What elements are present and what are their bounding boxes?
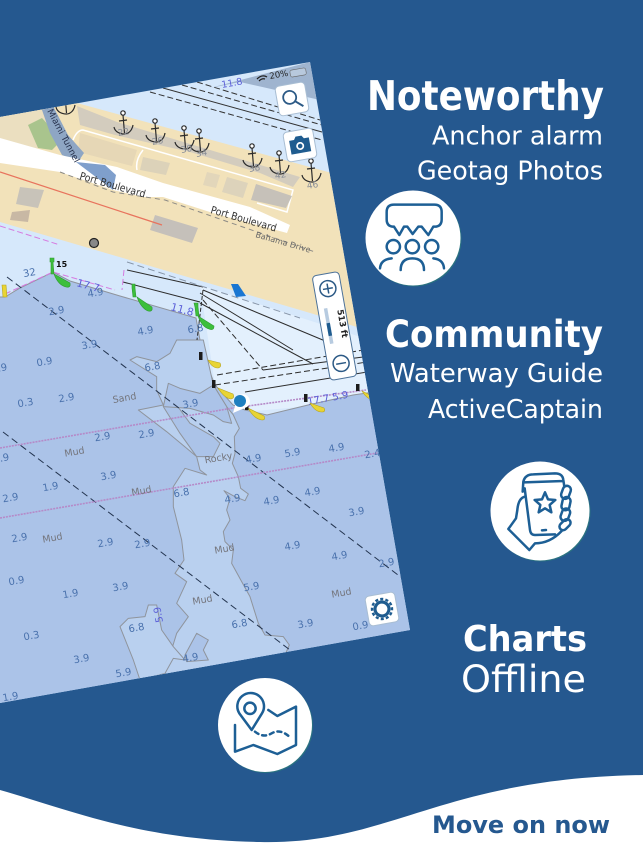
chart: dashed depth lines [3,277,402,650]
chart: depth numbers: 4.9 [304,486,321,499]
chart: depth numbers: 2.9 [11,532,28,545]
chart: depth numbers: 1.9 [2,691,19,704]
chart: purple soundings [75,76,349,623]
chart: purple soundings: 17.7 [75,277,101,295]
chart: seabed labels: Mud [192,593,213,608]
chart: anchor numbers: 46 [306,180,319,192]
chart: depth numbers: 6.8 [128,622,145,635]
chart: depth numbers: 2.4 [364,448,381,461]
chart: seabed labels: Rocky [204,451,234,466]
chart: purple soundings: 5.9 [152,606,166,623]
chart: depth numbers: 5.9 [284,447,301,460]
chart: depth numbers: 3.9 [81,339,98,352]
chart: seabed labels: Mud [42,531,63,546]
heading: Community: Community [385,313,603,356]
chart: anchor numbers: 34 [195,148,208,160]
chart: anchor numbers: 22 [117,127,130,139]
text: ActiveCaptain: ActiveCaptain [428,395,603,425]
chart: black beacons [199,352,360,410]
icon: blue boat marker [231,284,246,297]
chart: buoy number: 15 [56,260,68,269]
chart: seabed labels: Mud [331,586,352,601]
chart: road labels: Port Boulevard [78,170,147,201]
chart: purple wavy cable lines [0,390,377,518]
chart: depth numbers: 6.8 [144,361,161,374]
chart: depth numbers: 3.9 [100,470,117,483]
chart: depth numbers: 2.9 [58,392,75,405]
chart: shallow water base [0,50,420,710]
chart: anchor numbers: 38 [248,163,261,175]
button: zoom control: 513 ft [334,309,349,339]
chart: green buoys [50,258,214,330]
chart: depth numbers: 6.8 [173,487,190,500]
chart: depth numbers [0,267,395,704]
chart: seabed labels: Mud [131,484,152,499]
chart: depth numbers: 0.9 [8,575,25,588]
chart: seabed labels: Sand [112,391,137,406]
chart: depth numbers: 2.9 [97,537,114,550]
chart: anchor numbers: 30 [180,144,193,156]
chart: depth numbers: 4.9 [87,287,104,300]
chart: road labels [44,108,312,255]
chart: depth numbers: 3.9 [297,618,314,631]
button: camera [283,128,317,162]
chart: depth numbers: 4.9 [263,495,280,508]
chart: depth numbers: 2.9 [378,557,395,570]
text: Geotag Photos: Geotag Photos [417,156,603,186]
text: Move on now: Move on now [432,811,610,839]
chart: seabed labels [42,391,352,608]
chart: depth numbers: 5.9 [115,667,132,680]
heading: Noteworthy: Noteworthy [367,72,604,120]
chart: depth numbers: 1.9 [62,588,79,601]
button: search [275,82,309,116]
chart: depth numbers: 4.9 [224,493,241,506]
chart: depth numbers: 2.9 [48,305,65,318]
chart: seabed labels: Mud [64,445,85,460]
text: Offline: Offline [461,658,586,701]
chart: seabed labels: Mud [214,542,235,557]
chart: top water lines [150,82,322,140]
chart: anchors [56,104,322,183]
chart: Miami Tunnel strip [42,106,84,162]
chart: depth numbers: 2.9 [138,428,155,441]
chart: depth numbers: 2.9 [94,431,111,444]
white wave footer [0,775,643,858]
chart: purple soundings: 11.8 [221,76,243,91]
icon: wifi [257,76,267,81]
button: zoom control [312,271,357,381]
chart: lighter shoal channel [120,340,289,680]
chart: depth numbers: 6.8 [187,323,204,336]
chart: depth numbers: 3.9 [182,398,199,411]
chart: harbour channel lines [123,270,367,392]
chart: depth numbers: 3.9 [348,506,365,519]
chart: depth numbers: 32 [22,267,37,280]
chart: anchor numbers [117,127,319,192]
icon: map with location pin [218,678,313,773]
chart: depth numbers: 4.9 [137,325,154,338]
chart: purple soundings: 17.7 5.9 [307,390,349,408]
chart: depth numbers: 0.9 [352,620,369,633]
chart: purple soundings: 11.8 [169,301,195,319]
chart: depth numbers: 4.9 [284,540,301,553]
chart: wreck symbol [90,238,98,248]
chart: depth numbers: 4.9 [331,550,348,563]
chart: rail line [60,172,315,252]
chart: depth numbers: 1.9 [42,481,59,494]
chart: battery [290,68,307,77]
chart: anchor numbers: 42 [274,170,287,182]
chart: depth numbers: 0.3 [17,397,34,410]
chart: depth numbers: 3.9 [112,581,129,594]
chart: status bar shade [210,62,320,100]
chart: pink shore limit [0,226,124,294]
chart: depth numbers: 4.9 [245,453,262,466]
heading: Charts: Charts [463,619,587,660]
chart: depth numbers: 4.9 [328,442,345,455]
chart: status bar text: 20% [269,69,289,82]
text: Waterway Guide: Waterway Guide [390,359,603,389]
chart: yellow buoys [2,285,372,420]
chart: depth numbers: 0.9 [36,356,53,369]
text: Anchor alarm: Anchor alarm [432,122,603,152]
chart: red route line [0,172,162,225]
chart: depth numbers: 0.3 [23,630,40,643]
chart: land area [0,103,380,335]
chart: road labels: Port Boulevard [209,204,278,235]
chart: depth numbers: 3.9 [73,653,90,666]
chart: depth numbers: 2.9 [2,492,19,505]
chart: deep water [0,272,420,710]
chart: white channel band [0,138,290,233]
chart: anchor numbers: 26 [151,136,164,148]
chart: shore line [127,262,300,318]
chart: depth numbers: 5.9 [243,581,260,594]
chart: depth numbers: 2.9 [134,538,151,551]
chart: road labels: Miami Tunnel [44,108,81,165]
panel: tilted nautical chart [0,50,420,710]
chart: road labels: Bahama Drive [254,230,312,255]
icon: community group [366,190,462,286]
chart: harbour pale water [200,285,375,412]
chart: depth numbers: 6.8 [231,618,248,631]
button: settings [365,592,399,626]
icon: phone in hand with star [490,462,590,562]
icon: review marker [233,394,250,413]
chart: depth numbers: 4.9 [182,652,199,665]
